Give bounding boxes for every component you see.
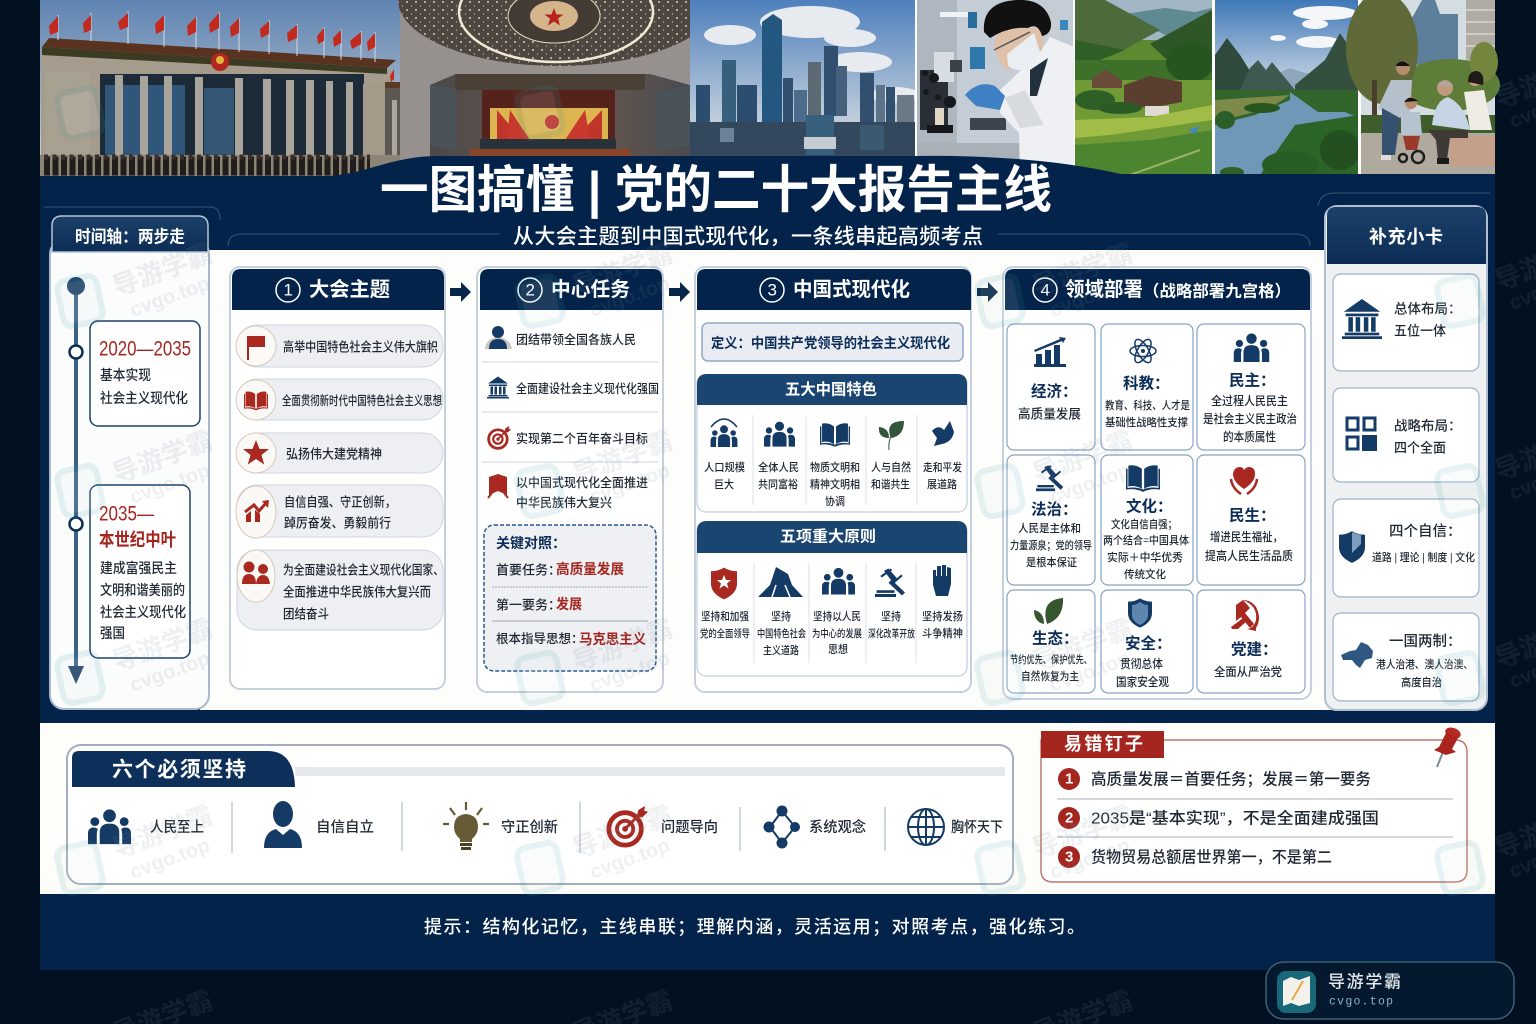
brand badge: cvgo.top bbox=[1329, 996, 1393, 1008]
key comparison box: 第一要务： bbox=[496, 598, 561, 612]
item: flag: 高举中国特色社会主义伟大旗帜 bbox=[283, 340, 438, 354]
timeline card: 2035-mid century: 社会主义现代化 bbox=[100, 604, 186, 620]
watermarks: 导游学霸 bbox=[109, 800, 217, 864]
feature: huge population: 人口规模 bbox=[704, 460, 745, 474]
card: strategic layout: 四个全面 bbox=[1394, 440, 1446, 456]
panel: six musts bbox=[67, 745, 1013, 884]
panel 2 heading bbox=[480, 269, 662, 310]
cell: party building: 党建： bbox=[1231, 640, 1278, 658]
cell: economy: 经济： bbox=[1031, 382, 1078, 400]
panel: 4 domain deployment bbox=[1003, 267, 1311, 699]
pitfall 2: 2035是“基本实现”，不是全面建成强国 bbox=[1091, 808, 1379, 828]
key comparison box: 首要任务： bbox=[496, 562, 561, 578]
cell: culture: 两个结合=中国具体 bbox=[1103, 533, 1189, 547]
cell: livelihood: 提高人民生活品质 bbox=[1205, 548, 1293, 563]
five principles heading bbox=[697, 521, 967, 553]
pitfall 2: 2 bbox=[1065, 810, 1073, 826]
watermarks: 导游学霸 bbox=[1029, 800, 1137, 864]
panel 4 heading: 领域部署 bbox=[1065, 278, 1143, 301]
cell: rule of law: 力量源泉；党的领导 bbox=[1010, 538, 1092, 552]
card: strategic layout: 战略布局： bbox=[1394, 418, 1462, 434]
watermarks: 导游学霸 bbox=[1029, 613, 1137, 677]
hero photo: family in park bbox=[1346, 0, 1500, 176]
pitfall 1: 1 bbox=[1065, 770, 1073, 788]
watermarks: 导游学霸 bbox=[569, 613, 677, 677]
hero photo: laboratory scientist bbox=[915, 0, 1075, 176]
must: problem oriented bbox=[609, 806, 718, 845]
principle: socialist road bbox=[757, 567, 806, 657]
task: national rejuvenation bbox=[488, 474, 648, 510]
white content area bbox=[200, 250, 1335, 710]
footer tip: 提示：结构化记忆，主线串联；理解内涵，灵活运用；对照考点，强化练习。 bbox=[424, 917, 1085, 937]
must: self-reliance: 自信自立 bbox=[316, 818, 374, 836]
watermarks: cvgo.top bbox=[1047, 834, 1133, 884]
timeline heading bbox=[52, 216, 208, 252]
pitfalls heading: 易错钉子 bbox=[1064, 734, 1143, 754]
principle: reform and opening: 坚持 bbox=[881, 609, 901, 623]
panel 1 heading: 大会主题 bbox=[309, 278, 390, 301]
item: people: 为全面建设社会主义现代化国家、 bbox=[283, 562, 444, 578]
timeline card: 2035-mid century: 建成富强民主 bbox=[100, 560, 177, 576]
item: book: 全面贯彻新时代中国特色社会主义思想 bbox=[282, 393, 442, 408]
principle: reform and opening: 深化改革开放 bbox=[868, 627, 915, 640]
cell: security bbox=[1101, 590, 1193, 693]
feature: peaceful development bbox=[923, 421, 962, 491]
cell: culture: 文化： bbox=[1126, 496, 1173, 516]
task: national rejuvenation: 以中国式现代化全面推进 bbox=[516, 475, 648, 490]
item: star bbox=[236, 433, 443, 473]
panel: supplementary cards bbox=[1325, 206, 1487, 710]
card: overall layout bbox=[1333, 274, 1479, 371]
cell: science and education: 科教： bbox=[1123, 374, 1170, 392]
must: people first: 人民至上 bbox=[150, 819, 204, 836]
task: national rejuvenation: 中华民族伟大复兴 bbox=[516, 495, 612, 510]
hero photo: green village bbox=[1075, 0, 1214, 176]
principle: people centered: 为中心的发展 bbox=[812, 627, 862, 640]
watermarks: 导游学霸 bbox=[569, 238, 677, 302]
arrow: 1 to 2 bbox=[450, 282, 471, 302]
timeline card: 2020-2035: 基本实现 bbox=[100, 367, 151, 383]
feature: huge population bbox=[704, 419, 745, 491]
card: four confidences: 四个自信： bbox=[1389, 523, 1462, 540]
feature: peaceful development: 走和平发 bbox=[923, 460, 962, 474]
feature: peaceful development: 展道路 bbox=[927, 477, 957, 491]
card: one country two systems: 港人治港、澳人治澳、 bbox=[1376, 657, 1473, 671]
cell: ecology bbox=[1007, 590, 1095, 693]
panel: timeline bbox=[50, 216, 209, 709]
pitfalls heading bbox=[1041, 731, 1164, 758]
principle: party leadership bbox=[700, 568, 750, 640]
item: people: 团结奋斗 bbox=[283, 606, 329, 622]
timeline card: 2035-mid century bbox=[90, 485, 190, 658]
must: global vision bbox=[908, 809, 1003, 845]
cell: culture: 传统文化 bbox=[1124, 567, 1166, 581]
panel 4 heading bbox=[1005, 269, 1310, 310]
panel 2 heading: 中心任务 bbox=[551, 278, 630, 301]
panel 2 heading: 2 bbox=[526, 280, 535, 300]
cell: democracy bbox=[1197, 324, 1305, 450]
watermarks: cvgo.top bbox=[127, 834, 213, 884]
cell: rule of law: 人民是主体和 bbox=[1018, 521, 1081, 535]
five principles heading: 五项重大原则 bbox=[780, 528, 876, 546]
six musts heading: 六个必须坚持 bbox=[112, 758, 246, 782]
key comparison box: 根本指导思想： bbox=[496, 631, 584, 646]
watermarks: cvgo.top bbox=[587, 459, 673, 509]
principle: socialist road: 中国特色社会 bbox=[757, 627, 806, 640]
principle: spirit of struggle: 斗争精神 bbox=[922, 626, 963, 640]
cell: democracy: 民主： bbox=[1229, 372, 1276, 390]
cell: culture: 文化自信自强； bbox=[1111, 517, 1177, 531]
card: one country two systems: 高度自治 bbox=[1401, 675, 1442, 689]
must: systems thinking bbox=[764, 806, 866, 848]
timeline card: 2035-mid century: 文明和谐美丽的 bbox=[100, 582, 185, 598]
timeline heading: 时间轴：两步走 bbox=[75, 226, 185, 246]
navy main background bbox=[40, 156, 1495, 970]
card: one country two systems: 一国两制： bbox=[1389, 633, 1462, 650]
key comparison box: 发展 bbox=[556, 596, 582, 612]
watermarks: cvgo.top bbox=[127, 459, 213, 509]
watermarks: cvgo.top bbox=[1047, 647, 1133, 697]
hero photo: karst river bbox=[1212, 0, 1360, 179]
decorative frame lines bbox=[44, 193, 1490, 246]
item: star: 弘扬伟大建党精神 bbox=[286, 446, 382, 462]
timeline card: 2020-2035 bbox=[90, 321, 200, 426]
watermarks: 导游学霸 bbox=[109, 425, 217, 489]
cell: party building bbox=[1197, 590, 1305, 693]
watermarks: cvgo.top bbox=[587, 647, 673, 697]
pitfall 3: 货物贸易总额居世界第一，不是第二 bbox=[1091, 848, 1332, 866]
five features bbox=[697, 374, 967, 512]
task: unite people: 团结带领全国各族人民 bbox=[516, 332, 636, 347]
cell: culture bbox=[1101, 455, 1193, 585]
pitfall 3: 3 bbox=[1065, 848, 1073, 866]
timeline card: 2035-mid century: 2035— bbox=[99, 502, 154, 526]
pitfall 2 bbox=[1058, 807, 1379, 829]
must: problem oriented: 问题导向 bbox=[661, 819, 718, 836]
six musts heading bbox=[72, 751, 295, 787]
cell: economy: 高质量发展 bbox=[1018, 406, 1081, 422]
timeline card: 2035-mid century: 强国 bbox=[100, 625, 125, 641]
watermarks: cvgo.top bbox=[127, 647, 213, 697]
watermarks: cvgo.top bbox=[587, 834, 673, 884]
principle: people centered: 思想 bbox=[828, 643, 848, 656]
hero photo: Great Hall exterior bbox=[40, 0, 440, 176]
principle: people centered bbox=[812, 568, 862, 656]
item: rising arrow: 自信自强、守正创新， bbox=[284, 494, 396, 510]
arrow: 3 to 4 bbox=[977, 282, 998, 302]
key comparison box: 关键对照： bbox=[496, 535, 566, 551]
arrow: 2 to 3 bbox=[669, 282, 690, 302]
watermarks: cvgo.top bbox=[1047, 272, 1133, 322]
pitfall 3 bbox=[1058, 846, 1332, 868]
cell: ecology: 生态： bbox=[1032, 628, 1079, 648]
feature: harmony with nature: 和谐共生 bbox=[871, 477, 910, 491]
must: people first bbox=[88, 809, 204, 844]
pitfall 1: 高质量发展＝首要任务；发展＝第一要务 bbox=[1091, 770, 1371, 788]
panel 3 heading bbox=[697, 269, 971, 310]
watermarks: 导游学霸 bbox=[569, 800, 677, 864]
feature: material and spiritual: 精神文明相 bbox=[810, 477, 860, 491]
five features heading: 五大中国特色 bbox=[785, 380, 877, 398]
key comparison box: 马克思主义 bbox=[579, 631, 646, 647]
cell: security: 安全： bbox=[1125, 634, 1172, 652]
hero photo: auditorium interior bbox=[398, 0, 718, 160]
principle: spirit of struggle bbox=[922, 565, 963, 640]
cell: security: 国家安全观 bbox=[1116, 674, 1169, 689]
panel: 2 central task bbox=[477, 267, 663, 692]
watermarks: 导游学霸 bbox=[569, 425, 677, 489]
supplementary heading bbox=[1327, 207, 1486, 264]
cell: ecology: 自然恢复为主 bbox=[1021, 669, 1079, 683]
cell: science and education bbox=[1101, 324, 1193, 450]
cell: party building: 全面从严治党 bbox=[1214, 664, 1282, 679]
feature: harmony with nature bbox=[871, 421, 911, 491]
feature: common prosperity: 共同富裕 bbox=[758, 477, 798, 491]
must: innovation: 守正创新 bbox=[501, 819, 558, 836]
principle: people centered: 坚持以人民 bbox=[813, 609, 861, 623]
panel 3 heading: 中国式现代化 bbox=[793, 278, 910, 301]
panel 4 heading: 4 bbox=[1040, 280, 1050, 300]
feature: material and spiritual bbox=[810, 423, 860, 508]
card: one country two systems bbox=[1333, 613, 1479, 701]
subtitle: 从大会主题到中国式现代化，一条线串起高频考点 bbox=[513, 226, 983, 248]
panel 3 heading: 3 bbox=[768, 280, 777, 300]
timeline card: 2035-mid century: 本世纪中叶 bbox=[99, 529, 176, 550]
watermarks: 导游学霸 bbox=[1029, 425, 1137, 489]
panel 4 heading: （战略部署九宫格） bbox=[1143, 282, 1291, 300]
cell: livelihood: 民生： bbox=[1229, 506, 1276, 524]
watermarks: cvgo.top bbox=[127, 272, 213, 322]
watermarks: 导游学霸 bbox=[109, 238, 217, 302]
definition box: 定义：中国共产党领导的社会主义现代化 bbox=[711, 335, 950, 351]
cell: rule of law bbox=[1007, 455, 1095, 585]
cell: science and education: 基础性战略性支撑 bbox=[1105, 415, 1188, 429]
must: self-reliance bbox=[264, 801, 374, 848]
card: overall layout: 总体布局： bbox=[1394, 300, 1462, 316]
task: unite people bbox=[485, 326, 636, 349]
must: systems thinking: 系统观念 bbox=[809, 818, 866, 836]
card: four confidences bbox=[1333, 499, 1479, 597]
task: build strong nation: 全面建设社会主义现代化强国 bbox=[516, 381, 659, 396]
feature: material and spiritual: 物质文明和 bbox=[810, 460, 860, 474]
lower light band bbox=[40, 723, 1495, 894]
cell: ecology: 节约优先、保护优先、 bbox=[1010, 653, 1092, 666]
cell: livelihood: 增进民生福祉， bbox=[1210, 529, 1283, 544]
principle: socialist road: 坚持 bbox=[771, 609, 791, 623]
cell: security: 贯彻总体 bbox=[1120, 657, 1163, 671]
feature: common prosperity: 全体人民 bbox=[758, 460, 799, 474]
hero photo: city skyline bbox=[690, 0, 920, 162]
watermarks: 导游学霸 bbox=[1029, 238, 1137, 302]
item: book bbox=[236, 379, 443, 420]
principle: reform and opening bbox=[868, 568, 915, 640]
card: overall layout: 五位一体 bbox=[1394, 322, 1446, 338]
must: innovation bbox=[443, 802, 558, 850]
five features heading bbox=[697, 374, 967, 405]
cell: economy bbox=[1007, 324, 1095, 450]
brand badge bbox=[1266, 962, 1514, 1019]
cell: livelihood bbox=[1197, 455, 1305, 585]
five principles bbox=[697, 521, 967, 676]
panel 1 heading bbox=[232, 269, 444, 310]
key comparison box bbox=[484, 525, 656, 671]
card: four confidences: 道路 | 理论 | 制度 | 文化 bbox=[1372, 550, 1475, 564]
task: build strong nation bbox=[487, 376, 659, 398]
supplementary heading: 补充小卡 bbox=[1369, 226, 1443, 247]
cell: rule of law: 是根本保证 bbox=[1026, 555, 1077, 569]
panel 1 heading: 1 bbox=[284, 280, 293, 300]
cell: democracy: 是社会主义民主政治 bbox=[1203, 411, 1297, 426]
item: flag bbox=[236, 325, 443, 367]
cell: science and education: 教育、科技、人才是 bbox=[1105, 398, 1190, 412]
item: rising arrow: 踔厉奋发、勇毅前行 bbox=[284, 516, 391, 530]
principle: socialist road: 主义道路 bbox=[763, 643, 799, 657]
panel: 1 congress theme bbox=[230, 267, 445, 689]
cell: rule of law: 法治： bbox=[1031, 500, 1078, 518]
feature: harmony with nature: 人与自然 bbox=[871, 460, 911, 474]
key comparison box: 高质量发展 bbox=[556, 561, 624, 577]
task: second centenary goal: 实现第二个百年奋斗目标 bbox=[516, 431, 648, 446]
panel: common pitfalls bbox=[1041, 726, 1467, 882]
definition box bbox=[702, 323, 963, 361]
principle: spirit of struggle: 坚持发扬 bbox=[922, 609, 963, 623]
principle: party leadership: 坚持和加强 bbox=[701, 609, 749, 623]
timeline card: 2020-2035: 2020—2035 bbox=[99, 338, 191, 360]
feature: common prosperity bbox=[758, 422, 799, 491]
brand badge: 导游学霸 bbox=[1328, 972, 1401, 992]
main title: 一图搞懂 | 党的二十大报告主线 bbox=[380, 162, 1052, 220]
card: strategic layout bbox=[1333, 388, 1479, 482]
cell: democracy: 的本质属性 bbox=[1223, 429, 1276, 444]
task: second centenary goal bbox=[489, 426, 648, 448]
feature: huge population: 巨大 bbox=[714, 477, 734, 491]
item: rising arrow bbox=[236, 485, 443, 538]
pitfall 1 bbox=[1058, 768, 1371, 790]
panel: 3 chinese modernization bbox=[695, 267, 971, 692]
item: people bbox=[237, 550, 444, 630]
watermarks: cvgo.top bbox=[1047, 459, 1133, 509]
cell: culture: 实际＋中华优秀 bbox=[1107, 550, 1183, 564]
icon: brand logo bbox=[1277, 971, 1316, 1013]
cell: democracy: 全过程人民民主 bbox=[1211, 393, 1288, 408]
feature: material and spiritual: 协调 bbox=[825, 494, 845, 508]
timeline axis bbox=[67, 277, 85, 684]
watermarks: 导游学霸 bbox=[109, 613, 217, 677]
watermarks: cvgo.top bbox=[587, 272, 673, 322]
principle: party leadership: 党的全面领导 bbox=[700, 627, 750, 640]
icon: pushpin bbox=[1434, 726, 1462, 767]
item: people: 全面推进中华民族伟大复兴而 bbox=[283, 584, 431, 600]
must: global vision: 胸怀天下 bbox=[951, 819, 1003, 836]
timeline card: 2020-2035: 社会主义现代化 bbox=[100, 390, 188, 406]
